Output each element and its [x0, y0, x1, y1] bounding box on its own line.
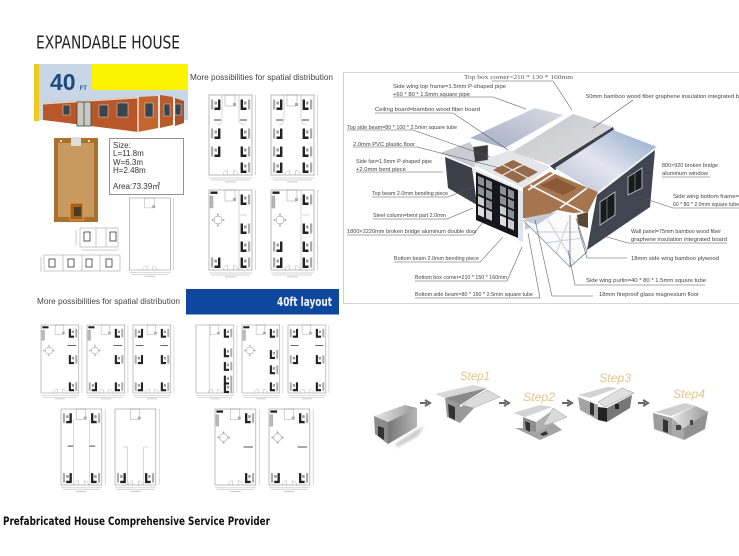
floor plan: upper 4 — [271, 190, 318, 277]
label: bottom box corner — [415, 247, 522, 281]
label: bottom beam: Bottom beam 2.0mm bending piece — [394, 256, 479, 262]
label: side wing top frame: +60 * 80 * 1.5mm square pipe — [393, 92, 470, 98]
house photo — [43, 95, 184, 132]
label: side fan — [356, 159, 443, 173]
label: side fan: Side fan=1.5mm P-shaped pipe — [356, 159, 432, 165]
label: side wing top frame: Side wing top frame=1.5mm P-shaped pipe — [393, 84, 506, 90]
arrow 2 — [499, 400, 509, 406]
step 2 label: Step2 — [523, 390, 555, 404]
label: ceiling board — [375, 107, 508, 150]
label: side wing bottom frame — [643, 194, 739, 208]
size specification box: L=11.8m — [113, 149, 144, 158]
floor plans: lower left group — [41, 325, 174, 492]
yellow header block — [92, 64, 188, 90]
step 4: fully expanded — [653, 403, 708, 440]
label: side wing plywood — [578, 227, 719, 262]
label: aluminum window: 800×920 broken bridge — [662, 163, 718, 169]
size specification box: W=6.3m — [113, 158, 143, 167]
light blue banner — [39, 64, 188, 120]
panel frame — [344, 72, 739, 304]
elevation drawing: end — [76, 228, 118, 250]
step 3 label: Step3 — [599, 371, 631, 385]
label: side wing bottom frame: Side wing bottom frame= — [673, 194, 739, 200]
panel: exploded structure diagram — [344, 72, 739, 304]
size specification box: Area:73.39㎡ — [113, 182, 160, 191]
floor plans: lower right group — [196, 325, 329, 492]
label: PVC floor: 2.0mm PVC plastic floor — [353, 142, 415, 148]
label: top beam: Top beam 2.0mm bending piece — [372, 191, 448, 197]
floor plan: upper 2 — [271, 95, 318, 182]
label: double door: 1800×2220mm broken bridge aluminum double door — [347, 229, 477, 235]
footer tagline: Prefabricated House Comprehensive Service Provider — [3, 514, 270, 528]
floor plan: upper 1 — [209, 95, 256, 182]
label: top box corner: Top box corner=210 * 130 * 160mm — [464, 75, 574, 81]
label: bottom beam — [394, 237, 503, 262]
title: EXPANDABLE HOUSE — [36, 34, 180, 54]
label: aluminum window: aluminum window — [662, 171, 709, 177]
banner: 40ft layout — [186, 289, 339, 314]
label: steel column: Steel column=bent part 2.0mm — [373, 213, 446, 219]
elevation drawing: side — [41, 255, 120, 272]
step 2: floor wing lowered — [513, 405, 567, 440]
label: wall panel: Wall panel=75mm bamboo wood fiber — [631, 229, 721, 235]
floor plan: empty layout — [130, 198, 174, 277]
label: insulation board — [586, 94, 739, 128]
banner: 40ft layout: 40ft layout — [277, 294, 332, 309]
label: bottom box corner: Bottom box corner=210 * 150 * 160mm — [415, 275, 507, 281]
heading: spatial distribution lower: More possibilities for spatial distribution — [37, 296, 180, 306]
label: insulation board: 50mm bamboo wood fiber graphene insulation integrated b — [586, 94, 739, 100]
arrow 3 — [562, 400, 572, 406]
label: bottom side beam: Bottom side beam=80 * 160 * 2.5mm square tube — [415, 292, 533, 298]
step 4 label: Step4 — [673, 387, 705, 401]
label: bottom side beam — [415, 233, 540, 298]
size specification box: Size: — [113, 141, 131, 150]
40 ft label: 40 FT — [50, 69, 87, 95]
arrow 4 — [638, 400, 648, 406]
label: side wing top frame — [393, 84, 526, 109]
panel: 40 ft model overview — [34, 64, 188, 132]
label: top box corner — [464, 75, 574, 110]
yellow side strip — [34, 64, 39, 121]
heading: spatial distribution upper: More possibilities for spatial distribution — [190, 72, 333, 82]
floor plan: upper 3 — [209, 190, 256, 277]
size specification box: H=2.48m — [113, 166, 146, 175]
arrow 1 — [420, 400, 430, 406]
label: top side beam: Top side beam=80 * 100 * 2.5mm square tube — [347, 125, 457, 131]
label: fireproof floor — [535, 220, 699, 298]
label: top beam — [372, 187, 473, 197]
label: PVC floor — [353, 142, 500, 168]
floor plan render — [54, 137, 98, 222]
label: double door — [347, 222, 483, 235]
label: fireproof floor: 18mm fireproof glass magnesium floor — [599, 292, 699, 298]
label: side fan: +2.0mm bent piece — [356, 167, 406, 173]
panel: expansion steps — [374, 369, 708, 447]
step 1: roof wing lifted — [435, 385, 500, 423]
label: wall panel — [600, 229, 727, 243]
label: steel column — [373, 208, 473, 219]
label: ceiling board: Ceiling board=bamboo wood fiber board — [375, 107, 480, 113]
step 1 label: Step1 — [460, 369, 490, 383]
size specification box — [110, 138, 184, 194]
label: wall panel: graphene insulation integrated board — [631, 237, 727, 243]
label: side wing plywood: 18mm side wing bamboo plywood — [631, 256, 719, 262]
label: side wing purlin — [568, 250, 706, 285]
step 3: walls unfolded — [578, 387, 634, 422]
label: top side beam — [347, 125, 490, 157]
label: aluminum window — [662, 163, 718, 177]
label: side wing purlin: Side wing purlin=40 * 80 * 1.5mm square tube — [586, 278, 706, 284]
step 0: folded container — [374, 405, 424, 447]
house structure — [440, 108, 657, 267]
